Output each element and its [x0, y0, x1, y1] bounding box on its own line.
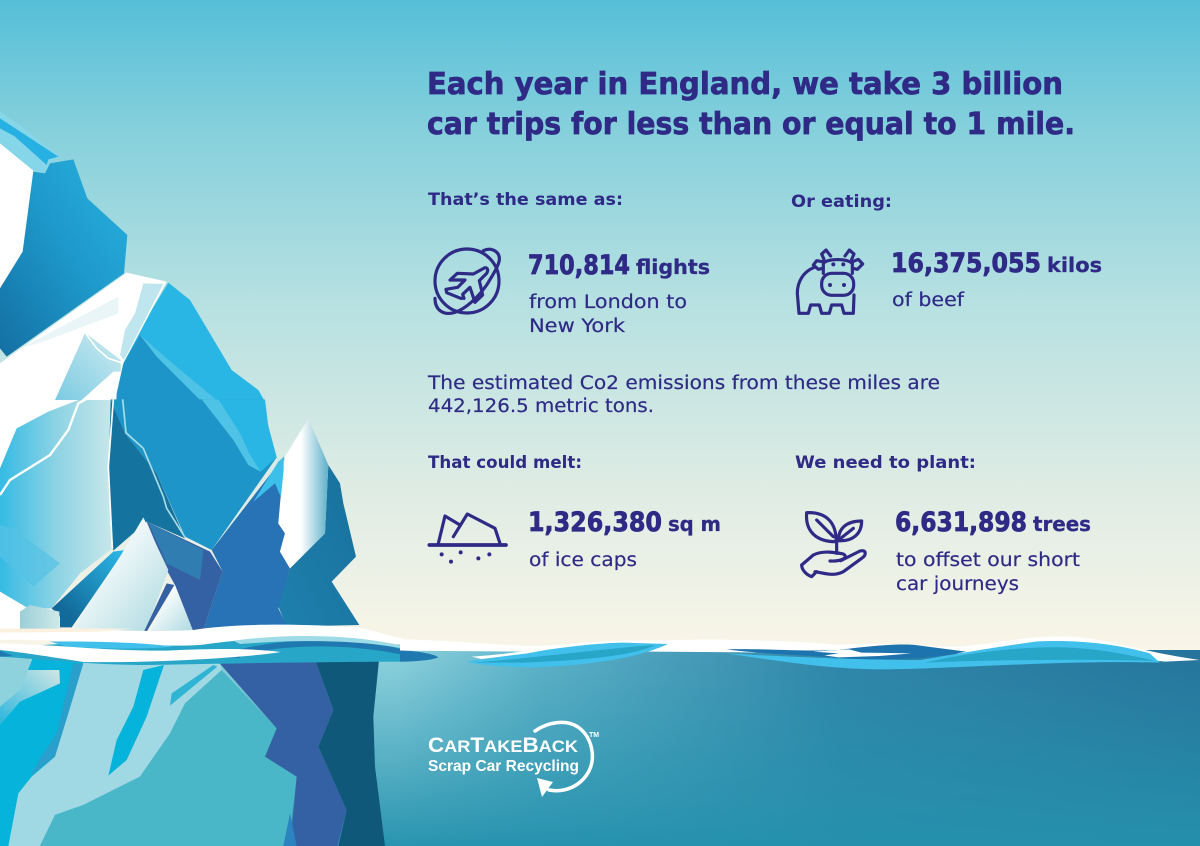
waterline left [0, 625, 403, 665]
heading: we need to plant: We need to plant: [795, 453, 976, 473]
stat: flights: from London to [529, 292, 687, 313]
icon: melting ice [429, 514, 506, 564]
stat: trees: car journeys [896, 574, 1019, 595]
logo: Car Take Back: CARTAKEBACK [428, 734, 579, 757]
stat: trees: to offset our short [896, 550, 1080, 571]
stat: flights: New York [529, 316, 625, 337]
sky background [0, 0, 1200, 660]
heading: that could melt: That could melt: [428, 453, 582, 473]
title [427, 67, 1075, 142]
heading: or eating: Or eating: [791, 192, 892, 212]
stat: trees [895, 507, 1091, 595]
stat: flights: 710,814 [528, 250, 630, 281]
stat: beef [891, 248, 1102, 311]
icon: cow [797, 250, 863, 313]
heading: that's the same as: That’s the same as: [428, 190, 623, 210]
stat: ice caps: 1,326,380 [528, 507, 662, 538]
title: car trips for less than or equal to 1 mile. [427, 107, 1075, 142]
stat: ice caps: sq m [668, 512, 721, 536]
stat: flights [528, 250, 710, 337]
icon: plant in hand [802, 513, 865, 577]
stat: beef: of beef [892, 290, 965, 311]
logo: Car Take Back [428, 722, 599, 797]
stat: flights: flights [636, 255, 710, 279]
stat: ice caps: of ice caps [529, 550, 637, 571]
iceberg above water: lower peaks [0, 399, 359, 633]
waterline right [400, 636, 1200, 669]
icon: plane and globe [435, 249, 499, 313]
title: Each year in England, we take 3 billion [427, 67, 1063, 102]
text: emissions statement [427, 373, 940, 417]
sea background [0, 650, 1200, 846]
text: emissions statement: 442,126.5 metric tons. [428, 396, 654, 417]
stat: trees: trees [1033, 512, 1091, 536]
stat: ice caps [528, 507, 721, 571]
stat: beef: kilos [1047, 253, 1102, 277]
logo: Car Take Back: Scrap Car Recycling [428, 758, 579, 775]
stat: beef: 16,375,055 [891, 248, 1041, 279]
text: emissions statement: The estimated Co2 emissions from these miles are [427, 373, 940, 394]
iceberg below water [0, 657, 385, 846]
stat: trees: 6,631,898 [895, 507, 1027, 538]
logo: Car Take Back: TM [589, 732, 599, 739]
iceberg above water: upper peaks [0, 112, 265, 433]
